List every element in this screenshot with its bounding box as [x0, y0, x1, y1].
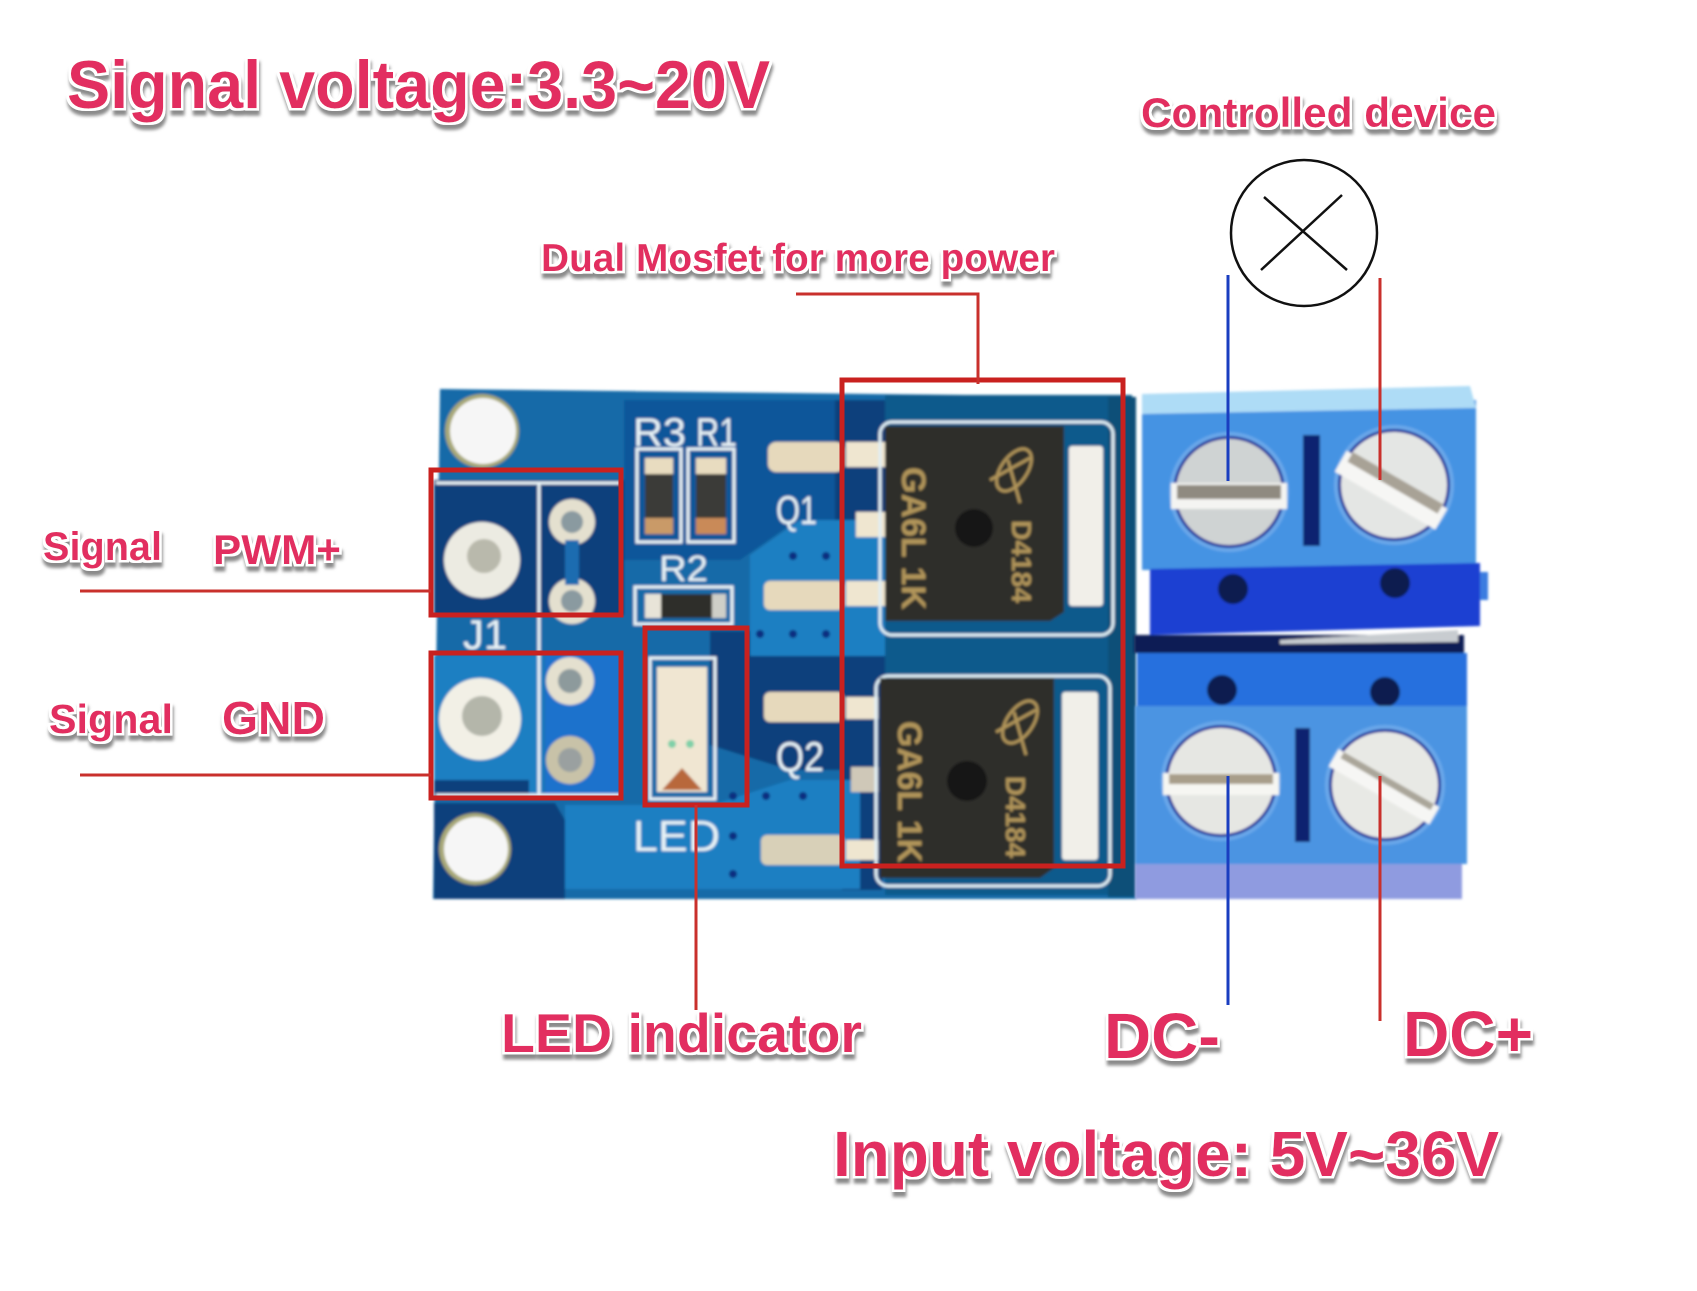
- marking Q1 D4184: D4184: [1006, 520, 1037, 603]
- callout box: dual mosfet: [842, 380, 1123, 866]
- title: input voltage: Input voltage: 5V~36V: [833, 1118, 1499, 1190]
- leader: signal GND: [80, 774, 431, 776]
- header pads signal: [444, 499, 595, 624]
- top terminal body: [1142, 400, 1476, 570]
- silk label J1: J1: [463, 611, 507, 658]
- mounting hole bottom: [439, 813, 511, 885]
- callout box: signal PWM+: [431, 470, 621, 615]
- marking Q2 GA6L: GA6L 1K: [890, 721, 928, 863]
- silk label R1: R1: [696, 411, 737, 455]
- screw top right: [1334, 425, 1454, 545]
- callout box: LED: [645, 628, 747, 805]
- lighter copper zones: [434, 520, 885, 889]
- gap highlight: [1280, 630, 1458, 644]
- circuit board photo: [433, 389, 1136, 899]
- mounting hole top: [445, 394, 519, 468]
- leader: dual mosfet: [796, 294, 978, 384]
- top terminal holes: [1218, 568, 1410, 604]
- header silkscreen: [436, 483, 620, 795]
- leader: device plus: [1378, 278, 1382, 480]
- top terminal highlight: [1142, 386, 1476, 414]
- label: GND: GND: [222, 692, 325, 744]
- title: signal voltage: Signal voltage:3.3~20V: [67, 47, 770, 123]
- silk label LED: LED: [633, 812, 720, 861]
- resistor R3: [637, 449, 681, 542]
- silk label Q2: Q2: [776, 733, 824, 780]
- label: DC minus: DC-: [1104, 1000, 1220, 1072]
- top terminal front: [1150, 563, 1480, 635]
- icon: controlled device lamp symbol: [1231, 160, 1377, 306]
- silk label R2: R2: [659, 548, 708, 589]
- bottom terminal holes: [1207, 675, 1400, 707]
- screw bottom right: [1325, 725, 1445, 845]
- marking Q1 GA6L: GA6L 1K: [894, 467, 932, 610]
- bottom terminal divider: [1295, 728, 1310, 842]
- resistor R1: [688, 449, 734, 542]
- leader: LED: [694, 805, 698, 1010]
- PCB base: [433, 389, 1136, 899]
- top terminal tab: [1480, 572, 1488, 600]
- label: LED indicator: LED indicator: [501, 1002, 862, 1064]
- via dots: [729, 552, 830, 878]
- silk label R3: R3: [633, 411, 686, 455]
- dark copper zones: [434, 400, 885, 899]
- label: PWM+: PWM+: [213, 526, 341, 573]
- callout box: signal GND: [431, 653, 621, 798]
- bottom terminal body: [1135, 706, 1467, 864]
- gap between terminals: [1134, 635, 1464, 653]
- logo Q2: [996, 695, 1044, 755]
- screw top left: [1169, 432, 1289, 552]
- mosfet Q1 solder pads and pins: [764, 442, 886, 610]
- mosfet Q2 solder pads and pins: [761, 692, 878, 865]
- leader: device minus: [1226, 275, 1230, 481]
- label: signal 2: Signal: [49, 696, 173, 742]
- label: controlled device: Controlled device: [1141, 89, 1496, 136]
- silk label Q1: Q1: [776, 489, 817, 533]
- bottom terminal base: [1135, 864, 1462, 899]
- logo Q1: [990, 443, 1038, 503]
- label: DC plus: DC+: [1403, 998, 1533, 1070]
- label: dual mosfet: Dual Mosfet for more power: [541, 237, 1055, 280]
- mosfet Q2 package: [876, 676, 1110, 886]
- leader: signal PWM+: [80, 590, 431, 592]
- leader: DC minus: [1226, 776, 1230, 1005]
- leader: DC plus: [1378, 776, 1382, 1021]
- dark strip under GND pad: [434, 780, 529, 798]
- LED component: [650, 658, 715, 799]
- marking Q2 D4184: D4184: [1000, 776, 1031, 858]
- resistor R2: [635, 587, 732, 624]
- mosfet area backing: [885, 395, 1132, 895]
- top terminal divider: [1303, 435, 1320, 546]
- label: signal 1: Signal: [43, 525, 162, 569]
- header pads GND: [439, 657, 594, 784]
- bottom terminal upper stripe: [1137, 653, 1467, 707]
- screw bottom left: [1161, 721, 1281, 841]
- terminal block top: [1134, 386, 1488, 899]
- mosfet Q1 package: [880, 422, 1113, 635]
